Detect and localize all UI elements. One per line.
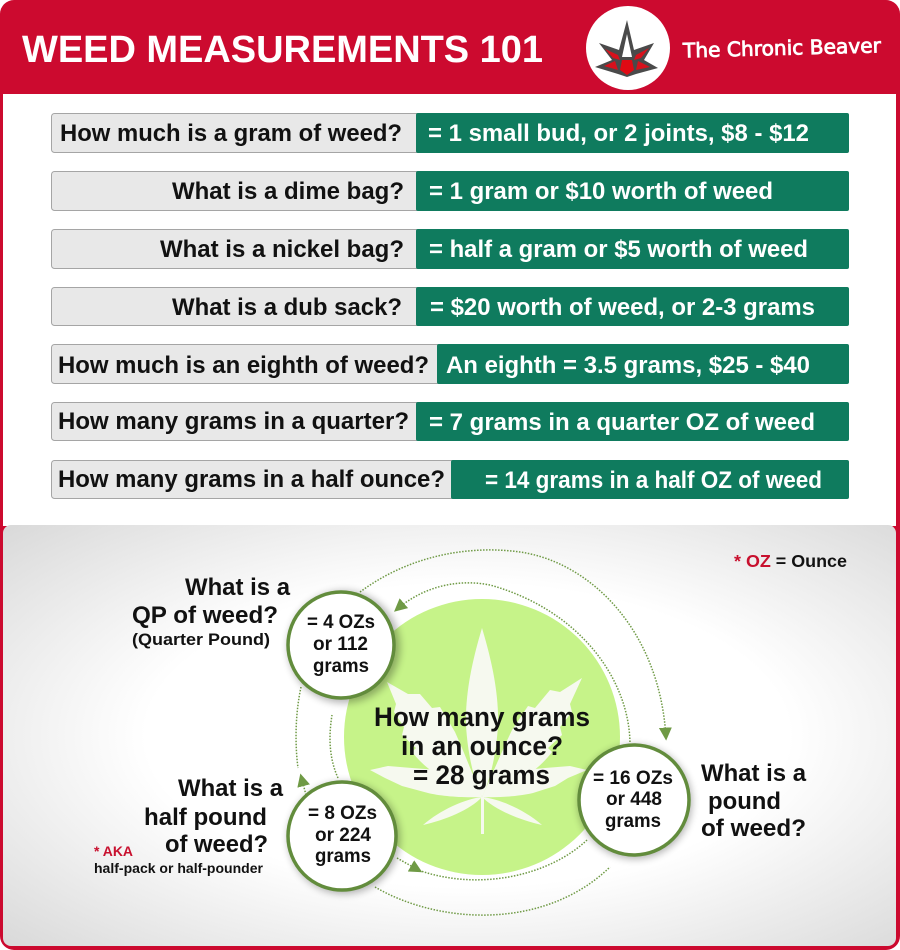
row: quarter: How many grams in a quarter? [58, 408, 409, 435]
row: dime bag [52, 171, 849, 211]
label: half pound question [144, 775, 284, 858]
row: nickel bag: = half a gram or $5 worth of weed [429, 236, 808, 263]
row: gram: How much is a gram of weed? [60, 120, 402, 147]
row: dub sack: = $20 worth of weed, or 2-3 grams [430, 294, 815, 321]
row: quarter: = 7 grams in a quarter OZ of weed [429, 409, 815, 436]
label: pound question: What is a [701, 760, 807, 787]
row: dime bag: What is a dime bag? [172, 178, 404, 205]
label: half pound aka note: half-pack or half-pounder [94, 860, 264, 876]
label: half pound aka note [94, 843, 264, 876]
panel: ounce diagram background [3, 525, 896, 946]
label: half pound question: What is a [178, 775, 284, 802]
label: half pound aka note: * AKA [94, 843, 133, 859]
row: dub sack: What is a dub sack? [172, 294, 402, 321]
row: eighth: An eighth = 3.5 grams, $25 - $40 [446, 352, 810, 379]
central question: in an ounce? [401, 731, 563, 761]
bubble: pound [578, 745, 692, 859]
label: QP question [132, 574, 291, 649]
row: nickel bag [52, 229, 849, 269]
central green circle [344, 599, 620, 875]
label: QP question: QP of weed? [132, 602, 278, 629]
logo [586, 6, 670, 90]
bubble: half pound: = 8 OZs [308, 802, 377, 824]
row: quarter [52, 402, 849, 441]
arrows: dotted cycle [296, 550, 666, 915]
label: QP question: What is a [185, 574, 291, 601]
bubble: quarter pound: grams [313, 655, 369, 677]
icon: cannabis leaf [370, 628, 587, 834]
row: half ounce: How many grams in a half ounce? [58, 466, 445, 493]
row: half ounce: = 14 grams in a half OZ of weed [485, 467, 822, 494]
label: half pound question: of weed? [165, 831, 268, 858]
label: pound question: pound [708, 788, 781, 815]
row: gram [52, 113, 849, 153]
row: half ounce [52, 460, 849, 499]
row: eighth [52, 344, 849, 384]
brand name: The Chronic Beaver [682, 33, 882, 63]
row: gram: = 1 small bud, or 2 joints, $8 - $12 [428, 120, 809, 147]
central question [374, 702, 590, 790]
title: WEED MEASUREMENTS 101 [22, 29, 543, 71]
bubble: half pound [288, 782, 400, 894]
bubble: quarter pound: = 4 OZs [307, 611, 375, 633]
label: QP question: (Quarter Pound) [132, 630, 270, 649]
bubble: quarter pound: or 112 [313, 633, 368, 655]
label: half pound question: half pound [144, 804, 267, 831]
footnote: ounce abbreviation: * OZ = Ounce [734, 551, 847, 571]
row: dime bag: = 1 gram or $10 worth of weed [429, 178, 773, 205]
central question: How many grams [374, 702, 590, 732]
row: dub sack [52, 287, 849, 326]
bubble: half pound: or 224 [315, 824, 371, 846]
bubble: pound: = 16 OZs [593, 767, 673, 789]
label: pound question: of weed? [701, 815, 806, 842]
bubble: quarter pound [288, 591, 400, 703]
row: eighth: How much is an eighth of weed? [58, 352, 429, 379]
white content area [3, 94, 896, 526]
bubble: half pound: grams [315, 845, 371, 867]
bubble: pound: grams [605, 810, 661, 832]
central question: = 28 grams [413, 760, 550, 790]
bubble: pound: or 448 [606, 788, 662, 810]
row: nickel bag: What is a nickel bag? [160, 236, 404, 263]
label: pound question [701, 760, 807, 842]
